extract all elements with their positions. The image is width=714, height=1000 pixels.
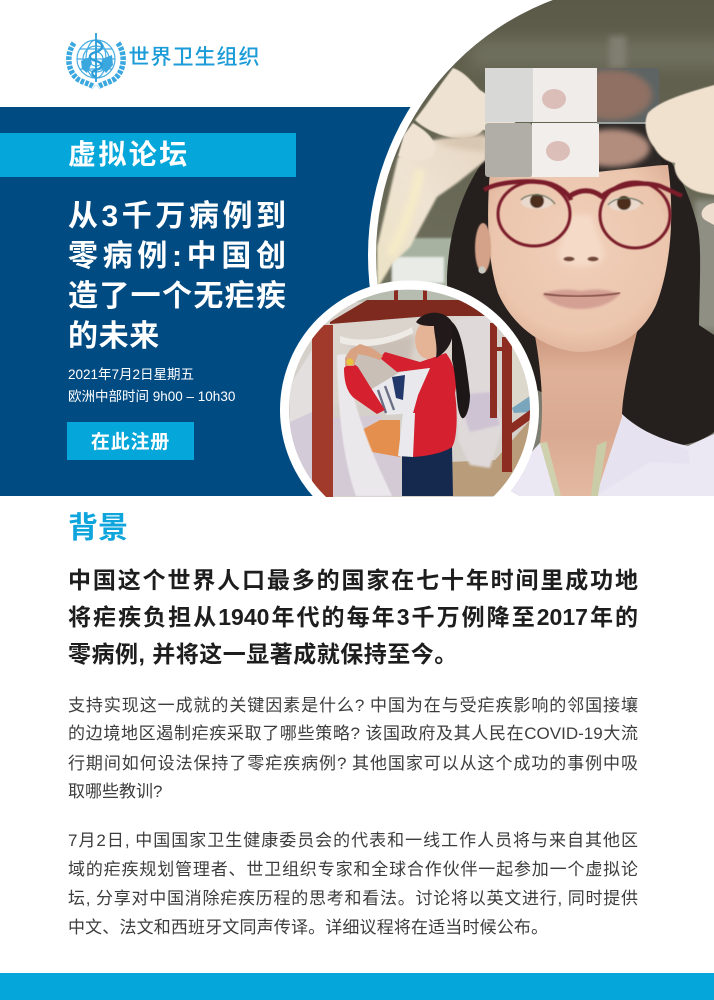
rod and serpent: [95, 33, 97, 82]
photo: girl hanging a bed net: [285, 285, 535, 500]
bunk frame: [330, 300, 490, 324]
heading: background: 背景: [68, 512, 128, 545]
glove left: palm: [377, 137, 486, 290]
coat: [503, 412, 714, 496]
window strip above bed: [356, 290, 463, 302]
body paragraph 1: 取哪些教训?: [68, 782, 162, 801]
body paragraph 2: 中文、法文和西班牙文同声传译。详细议程将在适当时候公布。: [68, 918, 548, 937]
ear: [475, 223, 491, 273]
lead statement: 零病例, 并将这一显著成就保持至今。: [68, 641, 458, 667]
hero graphic: blue panel and circular photos: [0, 0, 714, 497]
footer bar: [0, 973, 714, 1000]
hands: [345, 344, 383, 366]
back wall through net: [333, 315, 490, 405]
far bed at right: [514, 350, 530, 396]
date and time: [68, 367, 235, 404]
register button: [67, 422, 194, 460]
body paragraph 2: [68, 831, 638, 937]
lips: [542, 289, 620, 309]
room on left, lower: [391, 236, 452, 286]
body paragraph 2: 域的疟疾规划管理者、世卫组织专家和全球合作伙伴一起参加一个虚拟论: [68, 860, 638, 879]
glasses: [484, 181, 682, 248]
body paragraph 2: 7月2日, 中国国家卫生健康委员会的代表和一线工作人员将与来自其他区: [68, 831, 638, 850]
body paragraph 1: 行期间如何设法保持了零疟疾病例? 其他国家可以从这个成功的事例中吸: [68, 754, 638, 773]
title: 造了一个无疟疾: [68, 280, 286, 313]
band: forum label: [0, 133, 296, 177]
logo text: 世界卫生组织: [128, 46, 260, 69]
title: [68, 200, 286, 353]
laurel: [69, 43, 123, 87]
glove right: [646, 85, 714, 196]
logo: WHO emblem: [66, 33, 126, 90]
title: 零病例:中国创: [68, 240, 286, 273]
body paragraph 1: [68, 696, 638, 801]
bedding left and bottom: [290, 405, 312, 480]
lead statement: 中国这个世界人口最多的国家在七十年时间里成功地: [68, 567, 638, 593]
title: 的未来: [68, 320, 160, 353]
forum label text: 虚拟论坛: [68, 139, 190, 170]
orange pillow: [363, 420, 400, 457]
nose: [558, 215, 604, 267]
white ring around main photo: [368, 0, 714, 536]
trousers: [402, 447, 453, 496]
lighter ceiling band: [470, 40, 714, 68]
body paragraph 2: 坛, 分享对中国消除疟疾历程的思考和看法。讨论将以英文进行, 同时提供: [68, 889, 638, 908]
floor: [450, 420, 535, 496]
white ring around small photo: [280, 280, 539, 540]
head and ponytail: [415, 324, 436, 359]
body paragraph 1: 的边境地区遏制疟疾采取了哪些策略? 该国政府及其人民在COVID-19大流: [68, 724, 638, 743]
hair behind face: [447, 150, 714, 446]
panel: blue title background: [0, 107, 500, 496]
jacket: [344, 352, 457, 457]
glove left: fingers: [398, 122, 434, 157]
slide: [485, 68, 662, 177]
register button: 在此注册: [91, 432, 170, 453]
eyes: [521, 194, 643, 211]
lead statement: [68, 567, 638, 667]
body paragraph 1: 支持实现这一成就的关键因素是什么? 中国为在与受疟疾影响的邻国接壤: [68, 696, 638, 715]
net and bedding on right: [455, 315, 503, 468]
lead statement: 将疟疾负担从1940年代的每年3千万例降至2017年的: [68, 604, 638, 630]
left netting: [290, 350, 312, 422]
date and time: 2021年7月2日星期五: [68, 367, 194, 382]
date and time: 欧洲中部时间 9h00 – 10h30: [68, 389, 235, 404]
room on right: [695, 200, 714, 330]
earring: [478, 266, 486, 274]
face: [488, 165, 671, 352]
neck: [535, 331, 638, 496]
net drape: [337, 354, 392, 496]
photo: health worker holding a blood slide: [370, 0, 714, 496]
title: 从3千万病例到: [68, 200, 286, 233]
continents: [81, 55, 113, 73]
